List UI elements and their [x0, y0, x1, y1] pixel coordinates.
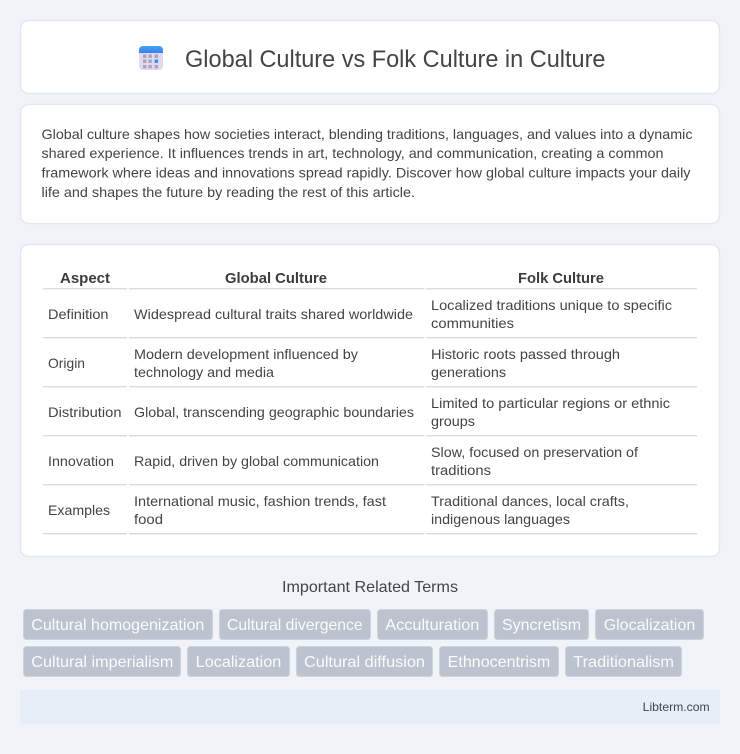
table header row: Aspect — [60, 270, 110, 287]
row: definition: communities — [431, 315, 514, 331]
row: origin: Modern development influenced by — [134, 346, 358, 362]
row: examples: indigenous languages — [431, 511, 570, 527]
tag list: related terms: Ethnocentrism — [448, 654, 550, 671]
panel: introduction — [20, 104, 720, 224]
footer credit: Libterm.com — [643, 700, 710, 714]
tag list: related terms: Syncretism — [502, 617, 581, 634]
tag list: related terms: Cultural imperialism — [31, 654, 173, 671]
tag list: related terms: Acculturation — [385, 617, 479, 634]
title: Global Culture vs Folk Culture in Culture — [185, 46, 606, 73]
tag list: related terms: Cultural diffusion — [304, 654, 425, 671]
row: innovation: Rapid, driven by global communication — [134, 453, 379, 469]
intro text: shared experience. It influences trends in art, technology, and communication, creating a common — [42, 145, 663, 161]
row: examples — [43, 493, 697, 534]
panel: comparison table — [20, 244, 720, 556]
tag list: related terms: Cultural homogenization — [31, 617, 204, 634]
heading: related terms: Important Related Terms — [282, 579, 458, 596]
intro text: framework where ideas and innovations spread rapidly. Discover how global culture impacts your daily — [42, 164, 690, 180]
row: distribution: Limited to particular regions or ethnic — [431, 395, 670, 411]
intro text — [42, 126, 692, 200]
tag list: related terms — [24, 610, 704, 676]
row: definition — [43, 297, 697, 338]
row: origin: technology and media — [134, 364, 274, 380]
row: innovation — [43, 444, 697, 485]
row: examples: food — [134, 511, 163, 527]
row: origin — [43, 346, 697, 387]
row: origin: Origin — [48, 355, 85, 371]
row: examples: Examples — [48, 502, 110, 518]
row: innovation: traditions — [431, 462, 491, 478]
row: origin: Historic roots passed through — [431, 346, 620, 362]
tag list: related terms: Cultural divergence — [227, 617, 363, 634]
tag list: related terms: Glocalization — [604, 617, 695, 634]
row: definition: Localized traditions unique to specific — [431, 297, 672, 313]
tag list: related terms: Localization — [196, 654, 281, 671]
table header row — [43, 270, 697, 289]
row: innovation: Innovation — [48, 453, 114, 469]
row: origin: generations — [431, 364, 506, 380]
table header row: Folk Culture — [518, 270, 604, 287]
panel: title header — [20, 20, 720, 94]
footer — [20, 690, 720, 724]
intro text: Global culture shapes how societies interact, blending traditions, languages, and values into a dynamic — [42, 126, 692, 142]
row: distribution: Global, transcending geographic boundaries — [134, 404, 414, 420]
row: distribution — [43, 395, 697, 436]
row: distribution: groups — [431, 413, 475, 429]
tag list: related terms: Traditionalism — [573, 654, 674, 671]
row: definition: Definition — [48, 306, 108, 322]
row: examples: Traditional dances, local crafts, — [431, 493, 629, 509]
row: definition: Widespread cultural traits shared worldwide — [134, 306, 413, 322]
row: examples: International music, fashion trends, fast — [134, 493, 386, 509]
intro text: life and shapes the future by reading the rest of this article. — [42, 184, 415, 200]
row: innovation: Slow, focused on preservation of — [431, 444, 638, 460]
icon: calendar — [139, 46, 163, 70]
row: distribution: Distribution — [48, 404, 122, 420]
table header row: Global Culture — [225, 270, 327, 287]
